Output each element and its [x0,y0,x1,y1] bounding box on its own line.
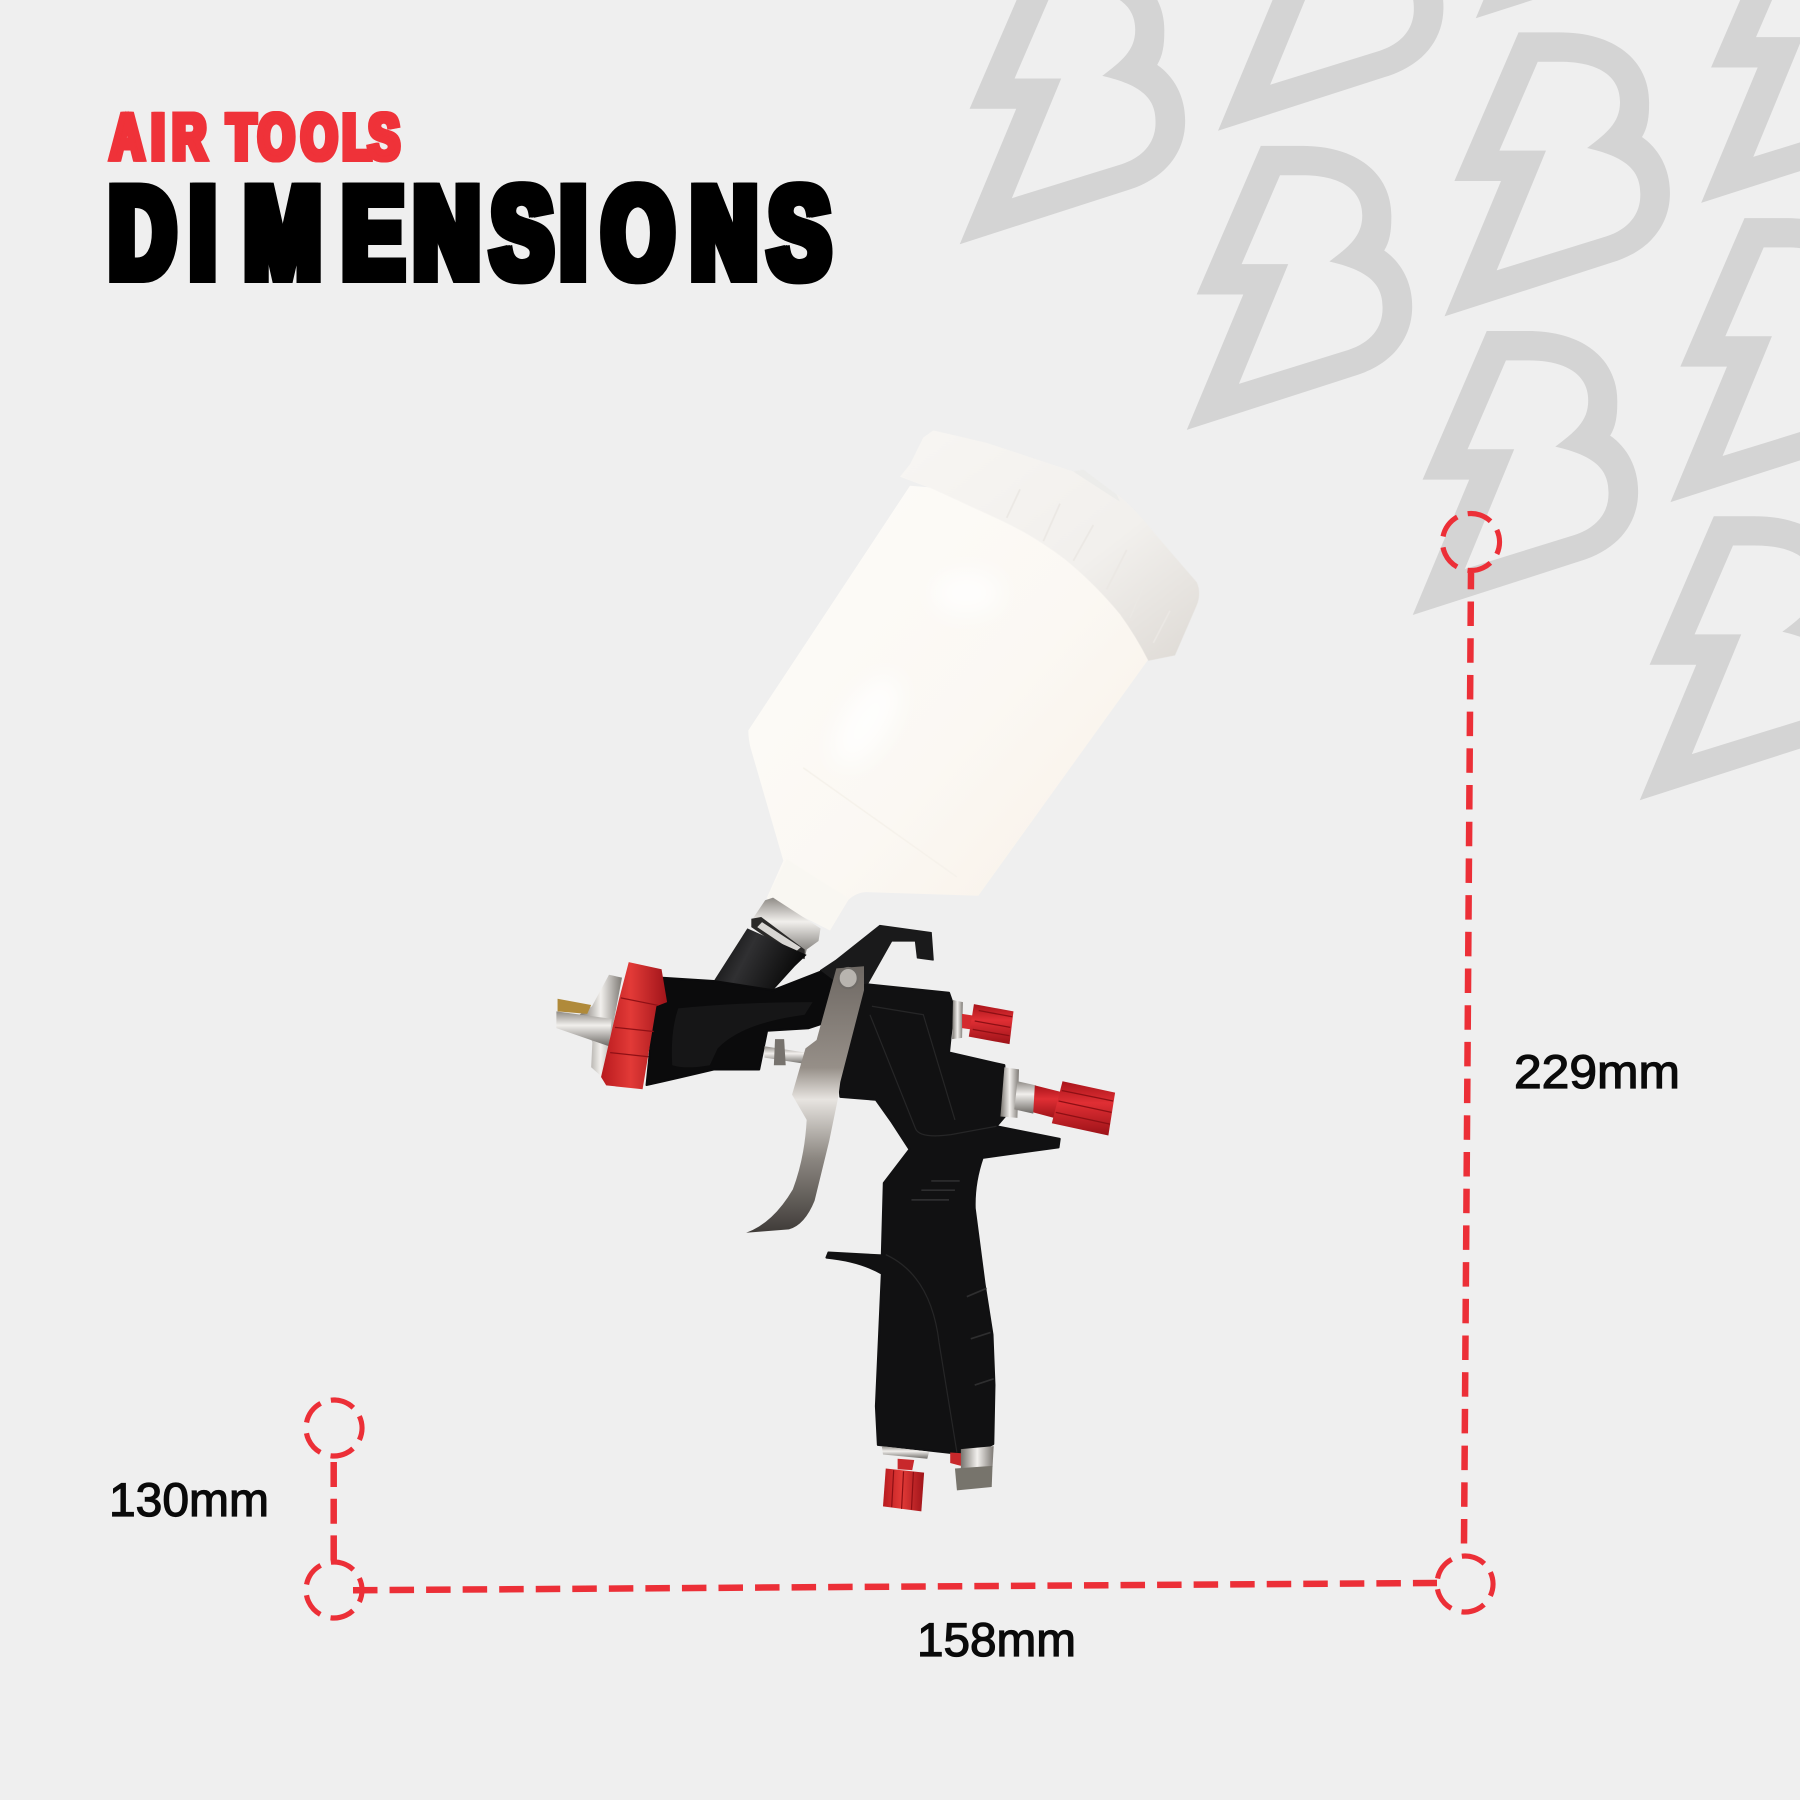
handle grooves [911,1181,994,1385]
cup lid [900,430,1199,661]
bottom-left circle [297,1553,371,1627]
icon: B logo [1413,331,1638,615]
barrel [647,972,844,1085]
label: 130mm: 130mm [109,1473,269,1526]
icon: B logo [1187,146,1412,430]
heading: DIMENSIONS: DIMENSIONS [109,159,830,305]
label: 158mm: 158mm [917,1613,1076,1666]
background pattern: B logos [960,0,1800,800]
vertical dashed line [1464,573,1471,1544]
body panel lines [870,1006,996,1452]
icon: B logo [1476,0,1701,18]
icon: B logo [1670,218,1800,502]
label: 229mm: 229mm [1514,1045,1680,1098]
dimension: 158mm line [353,1583,1437,1590]
red collar [601,962,667,1089]
cup highlights [819,571,1003,780]
dimension: 130mm marker [297,1391,371,1627]
fluid inlet neck [714,928,807,990]
top-left circle [297,1391,371,1465]
spray gun product image [556,430,1199,1511]
cup neck [767,859,848,930]
cup seam [803,768,957,877]
paint cup [748,430,1199,930]
upper hook [821,925,933,1002]
brass tip [558,999,591,1014]
air inlet [950,1452,962,1466]
cup fitting [751,898,821,958]
lid tab [1073,470,1120,502]
trigger [746,966,864,1233]
needle rod [764,1046,811,1064]
air cap [579,975,622,1078]
icon: B logo [1640,516,1800,800]
main body and handle [826,984,1060,1453]
bottom-right circle [1428,1547,1502,1621]
dimension: 229mm marker [1428,504,1509,1621]
title: AIR TOOLS: AIR TOOLS [111,102,399,173]
barrel sheen [672,1002,813,1067]
trigger pivot screw [839,968,858,988]
large knob stem [1000,1067,1019,1118]
cup body [748,486,1150,930]
collar ridges [610,998,658,1057]
icon: B logo [960,0,1185,244]
bottom screw [882,1446,929,1511]
gun [556,898,1115,1511]
top-right circle [1433,504,1509,580]
icon: B logo [1445,32,1670,316]
lid ribs [1007,489,1170,643]
icon: B logo [1218,0,1443,131]
small knob [952,1000,1013,1044]
vertical dashed line [330,1462,337,1561]
icon: B logo [1701,0,1800,203]
nozzle pipe [556,1011,612,1046]
large knob [1052,1081,1115,1135]
